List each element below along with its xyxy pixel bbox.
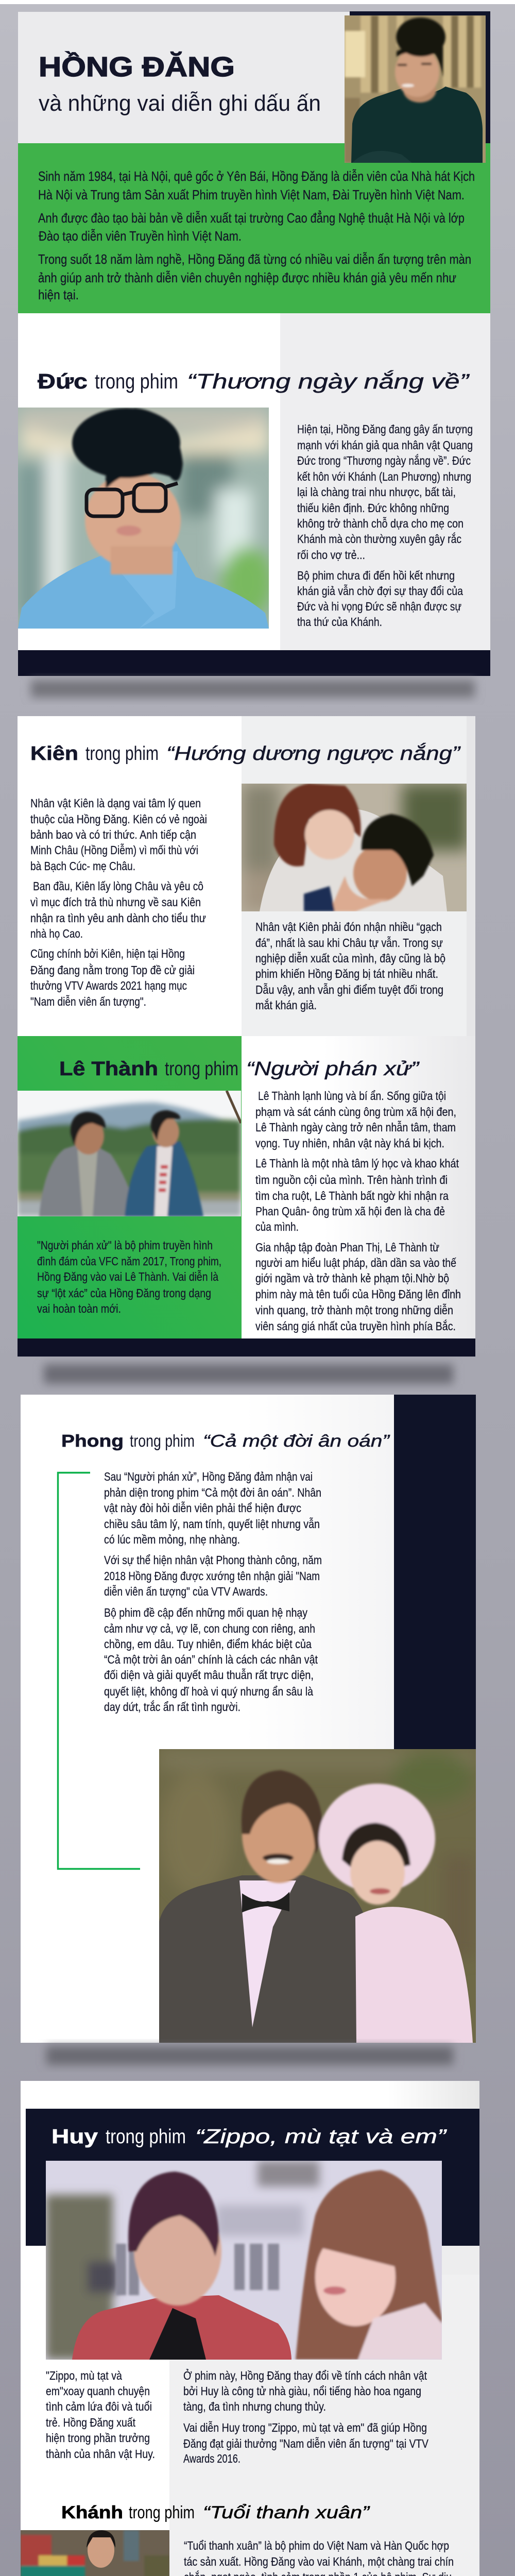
body text left: Cũng chính bởi Kiên, hiện tại Hồng xyxy=(30,947,185,960)
body text: chồng, em dâu. Tuy nhiên, điểm khác biệt của xyxy=(104,1637,312,1651)
heading: “Tuổi thanh xuân” xyxy=(203,2503,370,2522)
panel: intro header xyxy=(18,11,490,313)
body text left: Nhân vật Kiên là dạng vai tâm lý quen xyxy=(30,796,201,810)
body text: diễn viên ấn tượng" của VTV Awards. xyxy=(104,1585,268,1598)
heading xyxy=(59,1058,420,1080)
body text left: bà Bạch Cúc- mẹ Châu. xyxy=(30,859,135,873)
caption text xyxy=(46,2369,155,2461)
photo: Lê Thành by the lake xyxy=(18,1091,241,1216)
body text left xyxy=(30,796,207,1008)
biography text xyxy=(38,168,475,302)
body text right: nghiệp diễn xuất của mình, đây cũng là bộ xyxy=(255,952,445,965)
body text: vọng. Tuy nhiên, nhân vật này khá bi kịch. xyxy=(255,1137,444,1150)
body text: Ở phim này, Hồng Đăng thay đổi về tính cách nhân vật xyxy=(183,2368,427,2382)
green caption text: đình đám của VFC năm 2017, Trong phim, xyxy=(37,1255,221,1268)
photo: Phong wedding couple xyxy=(159,1749,476,2043)
green caption text: vai hoàn toàn mới. xyxy=(37,1302,121,1315)
panel: Lê Thành in Người phán xử xyxy=(18,1036,475,1338)
title: và những vai diễn ghi dấu ấn xyxy=(39,91,321,116)
heading xyxy=(30,742,461,765)
body text left: thưởng VTV Awards 2021 hạng mục xyxy=(30,979,187,992)
caption text: tình cảm lứa đôi và tuổi xyxy=(46,2400,152,2413)
body text: giới ngầm và trở thành kẻ phạm tội.Nhờ bộ xyxy=(255,1272,449,1285)
body text: rối cho vợ trẻ... xyxy=(297,548,365,562)
green caption text: "Người phán xử" là bộ phim truyền hình xyxy=(37,1239,213,1252)
body text xyxy=(104,1470,322,1714)
heading: trong phim xyxy=(106,2126,186,2148)
caption text: "Zippo, mù tạt và xyxy=(46,2369,122,2382)
body text: không trở thành chỗ dựa cho mẹ con xyxy=(297,517,464,530)
body text: Hiện tại, Hồng Đăng đang gây ấn tượng xyxy=(297,422,473,436)
body text: phản diện trong phim “Cả một đời ân oán”. Nhân xyxy=(104,1486,321,1499)
heading: “Thương ngày nắng về” xyxy=(187,369,470,393)
body text: “Tuổi thanh xuân” là bộ phim do Việt Nam và Hàn Quốc hợp xyxy=(184,2539,449,2552)
green caption text: Hồng Đăng vào vai Lê Thành. Vai diễn là xyxy=(37,1270,218,1283)
body text: người am hiểu luật pháp, dần dần sa vào thế xyxy=(255,1256,456,1269)
body text right: Dẫu vậy, anh vẫn ghi điểm tuyệt đối trong xyxy=(255,983,443,996)
body text: 2018 Hồng Đăng được xướng tên nhận giải "Nam xyxy=(104,1569,320,1583)
photo: Huy and partner xyxy=(46,2161,442,2360)
body text: mạnh với khán giả qua nhân vật Quang xyxy=(297,438,473,452)
caption text: hiện trong phần trưởng xyxy=(46,2431,150,2445)
body text xyxy=(184,2539,457,2576)
biography text: hiện tại. xyxy=(38,287,79,302)
heading: trong phim xyxy=(130,1431,195,1450)
title xyxy=(39,52,321,116)
green caption text: sự “lột xác” của Hồng Đăng trong dạng xyxy=(37,1286,211,1300)
body text: tìm cha ruột, Lê Thành bất ngờ khi nhận ra xyxy=(255,1189,449,1202)
panel: Huy in Zippo, mù tạt và em xyxy=(21,2081,479,2576)
body text: Khánh mà còn thường xuyên gây rắc xyxy=(297,532,461,546)
body text: Đức trong “Thương ngày nắng về”. Đức xyxy=(297,454,471,467)
heading: “Cả một đời ân oán” xyxy=(203,1431,390,1450)
body text: Lê Thành lạnh lùng và bí ẩn. Sống giữa tội xyxy=(258,1089,446,1103)
heading xyxy=(38,369,470,393)
body text: đối diện và giải quyết mâu thuẫn rất trực diện, xyxy=(104,1668,314,1682)
heading xyxy=(61,2503,370,2522)
body text: có lúc mềm mỏng, nhẹ nhàng. xyxy=(104,1533,240,1546)
body text: phim này mà tên tuổi của Hồng Đăng lên đỉnh xyxy=(255,1287,461,1301)
photo: Khánh on the street xyxy=(21,2530,169,2576)
body text: Bộ phim chưa đi đến hồi kết nhưng xyxy=(297,569,455,582)
biography text: Đào tạo diễn viên Truyền hình Việt Nam. xyxy=(39,228,242,244)
body text: viên sáng giá nhất của truyền hình phía Bắc. xyxy=(255,1319,456,1333)
body text: Đăng đạt giải thưởng "Nam diễn viên ấn tượng" tại VTV xyxy=(183,2437,429,2450)
body text left: vì mục đích trả thù nhưng về sau Kiên xyxy=(30,895,201,909)
body text left: thuộc của Hồng Đăng. Kiên có vẻ ngoài xyxy=(30,812,207,826)
body text: của mình. xyxy=(255,1220,299,1233)
caption text: em"xoay quanh chuyện xyxy=(46,2384,150,2398)
body text: Lê Thành là một nhà tâm lý học và khao khát xyxy=(255,1157,459,1170)
body text: tác sản xuất. Hồng Đăng vào vai Khánh, một chàng trai chín xyxy=(184,2555,454,2568)
heading: trong phim xyxy=(85,743,159,765)
body text right: đá”, nhất là sau khi Châu tự vẫn. Trong sự xyxy=(255,936,443,950)
body text left: nhà họ Cao. xyxy=(30,927,83,940)
body text: Awards 2016. xyxy=(183,2452,241,2465)
body text left: "Nam diễn viên ấn tượng". xyxy=(30,995,146,1008)
panel: Khánh in Tuổi thanh xuân xyxy=(21,2503,479,2576)
panel: Kiên in Hướng dương ngược nắng xyxy=(18,716,475,1036)
heading xyxy=(52,2126,448,2148)
body text: Lê Thành ngày càng trở nên nhẫn tâm, tham xyxy=(255,1121,456,1134)
body text: Sau “Người phán xử”, Hồng Đăng đảm nhận vai xyxy=(104,1470,313,1483)
green caption text xyxy=(37,1239,221,1315)
body text left: Đăng đang nằm trong Top đề cử giải xyxy=(30,963,195,977)
body text right: Nhân vật Kiên phải đón nhận nhiều “gạch xyxy=(255,920,442,934)
body text left: bảnh bao và có tri thức. Anh tiếp cận xyxy=(30,828,196,841)
heading: “Hướng dương ngược nắng” xyxy=(166,742,461,765)
heading: “Zippo, mù tạt và em” xyxy=(195,2126,448,2148)
body text left: nhận ra tình yêu anh dành cho tiểu thư xyxy=(30,911,206,925)
green bracket xyxy=(58,1472,140,1869)
body text: tìm nguồn cội của mình. Trên hành trình đi xyxy=(255,1173,448,1187)
body text left: Minh Châu (Hồng Diễm) vì mối thù với xyxy=(30,843,198,857)
body text right: phim khiến Hồng Đăng bị tát nhiều nhất. xyxy=(255,967,438,980)
heading: Huy xyxy=(52,2126,98,2148)
body text: thiếu kiên định. Đức không những xyxy=(297,501,449,515)
body text: kết hôn với Khánh (Lan Phương) nhưng xyxy=(297,470,471,483)
heading: Phong xyxy=(61,1431,124,1450)
heading: Khánh xyxy=(61,2503,123,2522)
body text: vinh quang, trở thành một trong những diễn xyxy=(255,1303,453,1317)
body text: Đức và hi vọng Đức sẽ nhận được sự xyxy=(297,600,461,613)
body text: khán giả vẫn chờ đợi sự thay đổi của xyxy=(297,584,463,598)
caption text: trẻ. Hồng Đăng xuất xyxy=(46,2416,136,2429)
heading: trong phim xyxy=(165,1058,238,1080)
body text: chiều sâu tâm lý, nam tính, quyết liệt nhưng vẫn xyxy=(104,1517,320,1531)
heading: Lê Thành xyxy=(59,1058,158,1080)
heading: trong phim xyxy=(95,369,178,393)
caption text: thành của nhân vật Huy. xyxy=(46,2447,155,2461)
body text left: Ban đầu, Kiên lấy lòng Châu và yêu cô xyxy=(33,879,203,893)
title: HỒNG ĐĂNG xyxy=(39,52,235,82)
body text xyxy=(255,1089,461,1333)
panel: Đức in Thương ngày nắng về xyxy=(18,313,490,650)
body text: lại là chàng trai nhu nhược, bất tài, xyxy=(297,485,456,499)
photo: portrait of Hồng Đăng xyxy=(345,15,486,163)
body text: cảm như vợ cả, vợ lẽ, con chung con riêng, anh xyxy=(104,1622,315,1635)
body text right xyxy=(255,920,445,1012)
body text: Gia nhập tập đoàn Phan Thị, Lê Thành từ xyxy=(255,1241,439,1254)
body text: bởi Huy là công tử nhà giàu, nổi tiếng hào hoa ngang xyxy=(183,2384,421,2398)
panel: Phong in Cả một đời ân oán xyxy=(21,1395,476,2043)
body text: Vai diễn Huy trong "Zippo, mù tạt và em" đã giúp Hồng xyxy=(183,2421,427,2434)
body text: vật này đòi hỏi diễn viên phải thể hiện được xyxy=(104,1501,301,1515)
body text: tha thứ của Khánh. xyxy=(297,615,382,629)
body text: phạm và sát cánh cùng ông trùm xã hội đen, xyxy=(255,1105,456,1118)
heading xyxy=(61,1431,390,1450)
heading: trong phim xyxy=(129,2503,195,2522)
body text: “Cả một trời ân oán” chính là cách các nhân vật xyxy=(104,1653,318,1666)
body text: Phan Quân- ông trùm xã hội đen là cha đẻ xyxy=(255,1205,445,1218)
photo: Kiên and Minh Châu xyxy=(242,784,469,912)
body text: tàng, đa tình nhưng chung thủy. xyxy=(183,2400,326,2413)
body text xyxy=(297,422,473,629)
photo: Đức with glasses xyxy=(18,408,273,629)
body text: Bộ phim đề cập đến những mối quan hệ nhạy xyxy=(104,1606,307,1619)
body text: day dứt, trắc ẩn rất tình người. xyxy=(104,1700,241,1714)
heading: Đức xyxy=(38,369,88,393)
heading: Kiên xyxy=(30,743,78,765)
body text right: mắt khán giả. xyxy=(255,998,317,1012)
body text: quyết liệt, không dĩ hoà vi quý nhưng ẩn sâu là xyxy=(104,1685,313,1698)
heading: “Người phán xử” xyxy=(246,1058,420,1080)
body text xyxy=(183,2368,429,2465)
panel: intro green biography xyxy=(18,143,490,313)
body text: Với sự thể hiện nhân vật Phong thành công, năm xyxy=(104,1553,322,1567)
